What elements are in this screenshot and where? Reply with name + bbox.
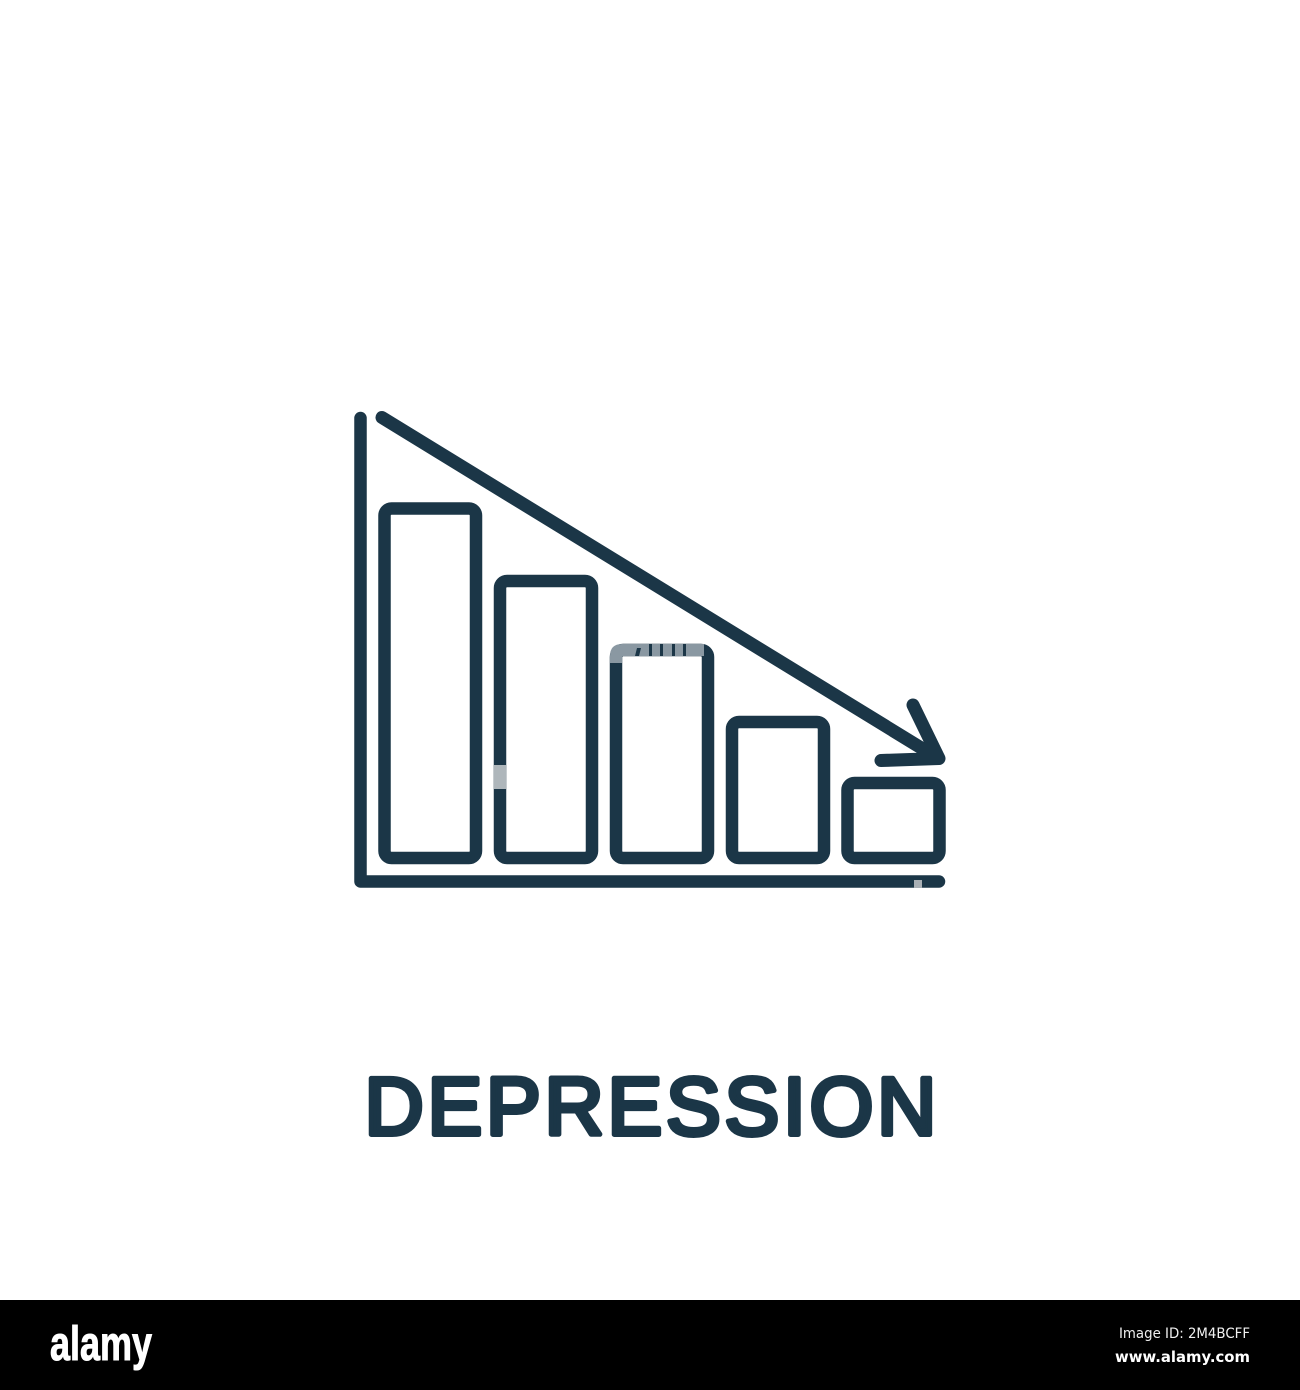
bar 2 bbox=[500, 581, 592, 858]
bar 3 bbox=[616, 650, 708, 858]
website: www.alamy.com bbox=[1115, 1348, 1250, 1366]
bar 1 bbox=[384, 508, 476, 858]
chart axes bbox=[360, 418, 939, 882]
bar 4 bbox=[732, 722, 824, 858]
footer bar bbox=[0, 1300, 1300, 1390]
arrow: downward trend bbox=[382, 418, 939, 760]
image id: Image ID: 2M4BCFF bbox=[1119, 1326, 1250, 1342]
alamy logo: alamy bbox=[50, 1318, 152, 1371]
icon: declining bar chart bbox=[360, 418, 940, 888]
bar 5 bbox=[848, 783, 940, 858]
title: DEPRESSION bbox=[364, 1062, 940, 1152]
